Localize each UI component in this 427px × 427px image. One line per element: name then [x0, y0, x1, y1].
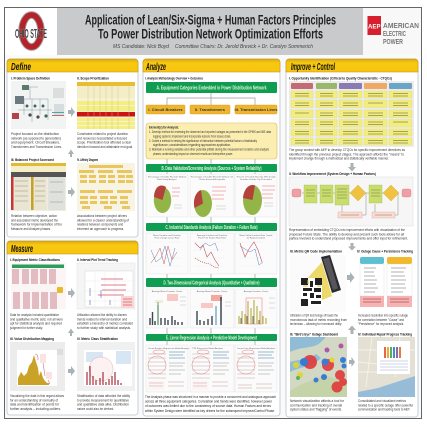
arrow	[68, 366, 75, 376]
metric class stratification: nature could also be derived.	[77, 407, 114, 411]
outage cause and persistence tracking	[357, 248, 413, 326]
analyze summary: of outcomes was limited due to the consistency of source data. Human Factors and errors	[145, 403, 271, 408]
equipment metric classifications: and qualitative metric sets; not all were	[10, 317, 63, 321]
subtitle: Committee Chairs: Dr. Jerold Brevick + Dr. Carolyn Sommerich	[175, 44, 313, 50]
arrow	[68, 288, 75, 298]
scope prioritization	[77, 76, 135, 149]
bar chart 2	[190, 289, 234, 328]
elements for analysis: phases; understanding impact on observed results and interpretive power.	[153, 152, 233, 156]
arrow	[347, 272, 354, 283]
metric class stratification: and qualitative data alike. Distribution	[77, 403, 129, 407]
bar: equipment categories: A. Equipment Categories Embedded in Power Distribution Network	[156, 86, 267, 92]
balanced project scorecard: and associated metric developed the	[11, 218, 58, 222]
pie chart 3: Duration Outside Top Percentiles	[240, 178, 273, 181]
line chart 2: From Prior Failure Rate Rate	[198, 236, 227, 240]
analyze summary: across all three equipment categories. Correlation and trends were identified, however power	[145, 399, 273, 404]
affinity diagram	[77, 157, 135, 231]
logo: American Electric Power: AEP	[368, 24, 380, 30]
connectors	[167, 93, 255, 345]
elements for analysis: 2. Create a method for testing the significance of interaction between potential factors of statistically	[149, 139, 257, 143]
affinity diagram: allowed for a clearer understanding of	[77, 218, 130, 222]
bird's eye outage dashboard: Network visualization affords a tool for	[290, 399, 345, 403]
balanced project scorecard: framework for implementation of the	[11, 223, 62, 227]
bird's eye outage dashboard: communication and tracking of overall	[290, 403, 342, 407]
value distribution mapping	[10, 336, 65, 411]
interval plot trend tracking: establish a hierarchy of metrics correlated	[77, 322, 133, 326]
individual repair progress tracking	[358, 332, 415, 412]
analyze heading	[143, 59, 280, 73]
bar: industrial standards	[146, 223, 277, 231]
problem space definition: Project focused on the distribution	[11, 132, 59, 136]
arrow	[68, 150, 74, 157]
panel: measure	[7, 241, 138, 415]
panel: analyze	[143, 59, 280, 416]
analyze subheading: I. Analysis Methodology Overview + Outcomes	[145, 76, 204, 80]
workflow description	[289, 228, 408, 241]
value distribution mapping: data and identification of points for	[10, 403, 60, 407]
pie chart 1: Root Delay Analysis	[157, 178, 178, 181]
metric class stratification: to provide measurement for quantitative	[77, 398, 129, 402]
equipment metric classifications: Data for analysis included quantitative	[10, 313, 59, 317]
logo: American Electric Power: ELECTRIC	[383, 31, 406, 38]
QR code implementation	[290, 248, 347, 326]
scope prioritization: scope. Prioritization tool afforded a clear	[77, 141, 132, 145]
bar: linear regression	[146, 334, 277, 342]
value distribution mapping: further analysis – including outliers.	[10, 407, 61, 411]
interval plot trend tracking: II. Interval Plot Trend Tracking	[77, 257, 118, 262]
outage cause and persistence tracking: for correlation between "Cause" and	[358, 318, 404, 322]
workflow subheading: II. Workflow Improvement (System Design + Human Factors)	[289, 171, 377, 176]
elements for analysis	[146, 123, 277, 159]
box: transmission lines	[235, 105, 278, 114]
regression panel 3: Transit Line Regression Model Analysis	[237, 347, 276, 350]
problem space definition	[11, 76, 66, 149]
workflow description: proposed Future State. The ability to develop and present such tools allows for all	[289, 232, 404, 236]
bar chart 2: Average Mean Duration, Cause	[197, 290, 228, 293]
regression panel 1	[146, 345, 190, 392]
elements for analysis: 1. Develop method for reviewing the observed and reported outages as presented in the OPMS and IBS data	[149, 130, 272, 134]
affinity diagram: relations between components and	[77, 223, 123, 227]
bird's eye outage dashboard: III. "Bird's Eye" Outage Dashboard	[290, 332, 338, 336]
line chart 3: Mean Value Duration Rate Trends	[240, 234, 273, 237]
CTQC table	[289, 81, 414, 147]
scope prioritization: II. Scope Prioritization	[77, 76, 109, 80]
box: transmission lines: III. Transmission Lines	[235, 107, 278, 112]
value distribution mapping: III. Value Distribution Mapping	[10, 336, 54, 341]
bar: linear regression: E. Linear Regression Analysis + Predictive Model Development	[166, 336, 257, 342]
pie chart 2: Charts Ensured Acceptable	[199, 178, 226, 181]
bar: two-dimensional categorical: D. Two-Dimensional Categorical Analysis (Quantitative + Qualitative)	[164, 280, 260, 286]
bar: two-dimensional categorical	[146, 278, 277, 287]
individual repair progress tracking: related to a specific outage offer powerful	[358, 403, 413, 407]
problem space definition: network (as opposed to generation)	[11, 136, 62, 140]
bar chart 1: Average Mean Duration, Cause	[152, 290, 183, 293]
CTQC description: identified through the previous project stages. The approach affords the "means" to	[289, 152, 404, 156]
bar: equipment categories	[146, 82, 277, 93]
outage cause and persistence tracking: Increased resolution into specific outage	[358, 314, 408, 318]
value distribution mapping: Visualizing the data in this regard allows	[10, 394, 64, 398]
box: transformers	[190, 105, 230, 114]
balanced project scorecard: Measure and Analyze phases.	[11, 227, 51, 231]
logo: American Electric Power: AMERICAN	[383, 23, 419, 30]
elements for analysis: 3. Maintain a running variable and other potential pitfalls during the measurement creation and analysis	[149, 148, 269, 152]
analyze heading: Analyze	[145, 62, 166, 73]
line chart 1	[146, 233, 188, 274]
interval plot trend tracking: trends related to interval duration and	[77, 317, 127, 321]
scope prioritization: Constraints related to project duration	[77, 132, 128, 136]
arrow	[349, 357, 355, 367]
QR code implementation: Utilization of QR technology off-loads the	[290, 314, 338, 318]
arrow	[68, 328, 74, 336]
equipment metric classifications: I. Equipment Metric Classifications	[10, 257, 61, 262]
balanced project scorecard: III. Balanced Project Scorecard	[11, 157, 54, 162]
affinity diagram: Associations between project drivers	[77, 214, 127, 218]
bar chart 3	[235, 289, 277, 328]
regression panel 3	[235, 345, 277, 392]
equipment metric classifications: apt for statistical analysis and required	[10, 322, 62, 326]
line chart 1: From Outage Cause Rate	[154, 236, 180, 240]
analyze summary: within System Design were identified as key drivers for the subsequent Improve/Control Phase.	[145, 408, 275, 413]
line chart 2: Average Duration and Duration	[197, 234, 228, 237]
problem space definition: I. Problem Space Definition	[11, 76, 50, 80]
interval plot trend tracking	[77, 257, 135, 330]
regression panel 2: TTR Regression Model Analysis	[192, 347, 224, 350]
define heading: Define	[11, 62, 31, 73]
equipment metric classifications	[9, 257, 66, 330]
measure heading: Measure	[11, 244, 33, 255]
problem space definition: Transformers and Transmission Lines.	[11, 145, 62, 149]
interval plot trend tracking: to further study with statistical analysis.	[77, 326, 131, 330]
bird's eye outage dashboard	[290, 332, 347, 412]
line chart 2	[190, 233, 234, 274]
logo: Ohio State	[15, 15, 47, 47]
subtitle: MS Candidate: Nick Boyd	[113, 44, 169, 50]
pie chart 2	[190, 174, 234, 217]
arrow	[68, 107, 75, 117]
panel: define	[7, 59, 138, 237]
bird's eye outage dashboard: system status and "flagging" of events.	[290, 408, 342, 412]
pie chart 1	[146, 174, 188, 217]
analyze summary	[145, 394, 276, 413]
logo: American Electric Power	[368, 16, 419, 46]
title	[85, 12, 336, 42]
metric class stratification	[77, 336, 135, 411]
line chart 1: Mean Duration and Duration	[153, 234, 182, 237]
define heading	[7, 59, 138, 73]
pie chart 2: Percentage of Trouble Records Without Out	[191, 176, 234, 178]
measure heading	[7, 241, 138, 255]
regression panel 2	[190, 345, 234, 392]
scope prioritization: and resources necessitated a focused	[77, 136, 127, 140]
arrow	[348, 163, 356, 172]
elements for analysis: significance; considerations regarding approaches application.	[153, 143, 231, 147]
header band	[5, 8, 421, 55]
arrow	[68, 187, 75, 197]
arrow	[348, 326, 356, 334]
header band: OHIO STATE	[15, 26, 47, 41]
problem space definition: and equipment: Circuit Breakers,	[11, 141, 60, 145]
equipment metric classifications: judgment for further study.	[9, 326, 43, 330]
scope prioritization: direction forward and attainable end goal.	[77, 145, 133, 149]
box: transformers: II. Transformers	[195, 107, 226, 112]
balanced project scorecard	[11, 157, 66, 231]
metric class stratification: IV. Metric Class Stratification	[77, 336, 118, 341]
line chart 3: for Repeat Incident	[247, 236, 266, 240]
opportunity identification subheading: I. Opportunity Identification (Critical to Quality Characteristic - CTQCs)	[289, 76, 393, 80]
bar chart 1	[146, 289, 188, 328]
affinity diagram: informed an approach to progress.	[77, 227, 124, 231]
bar: industrial standards: C. Industrial Standards Analysis (Failure Duration + Failure Rate)	[166, 225, 258, 231]
logo: American Electric Power: POWER	[383, 39, 403, 46]
line chart 3	[235, 233, 277, 274]
outage cause and persistence tracking: "Persistence" for improved analysis.	[358, 322, 404, 326]
value distribution mapping: for an understanding of normality of	[10, 398, 59, 402]
CTQC description: implement change through a methodical and statistically verifiable manner.	[289, 157, 389, 161]
box: circuit breakers: I. Circuit Breakers	[148, 107, 183, 112]
interval plot trend tracking: Utilization allowed the ability to discern	[77, 313, 127, 317]
improve heading	[286, 59, 418, 73]
pie chart 3: Percent of Trouble Records With Invalid	[237, 176, 276, 178]
balanced project scorecard: Relation between objective, action	[11, 214, 57, 218]
pie chart 3	[235, 174, 277, 217]
elements for analysis: Element(s) for Analysis:	[149, 126, 179, 130]
metric class stratification: Stratification of data afforded the ability	[77, 394, 130, 398]
subtitle	[113, 44, 313, 50]
bar chart 3: Average Duration, Cause	[244, 290, 269, 293]
elements for analysis: logging systems; implement and incorporate lessons from issues chain.	[153, 134, 231, 138]
bar: data validation: B. Data Validation/Screening Analysis (Sources + System Reliability)	[162, 166, 262, 172]
QR code implementation: technician – allowing for increased utility.	[290, 322, 342, 326]
pie chart 1: Percentage of Trouble Records Without	[148, 176, 187, 178]
title: To Power Distribution Network Optimization Efforts	[98, 26, 323, 42]
box: circuit breakers	[146, 105, 185, 114]
arrow	[348, 243, 356, 250]
bar: data validation	[146, 164, 277, 172]
regression panel 1: Circuit Breaker Regression Model Analysis	[148, 347, 190, 350]
individual repair progress tracking: Consolidated and visualized metrics	[358, 399, 406, 403]
improve heading: Improve + Control	[291, 62, 335, 73]
workflow diagram	[289, 177, 413, 226]
individual repair progress tracking: communication and tracking tools to AEP.	[358, 408, 410, 412]
panel: improve and control	[286, 59, 418, 417]
QR code implementation: III. Metric QR Code Implementation	[290, 248, 342, 254]
CTQC description	[289, 148, 405, 161]
affinity diagram: IV. Affinity Diagram	[77, 157, 98, 162]
analyze summary: The Analysis phase was structured in a manner to provide a concurrent and analogous approach	[145, 394, 276, 399]
QR code implementation: monotonous task of metric recording from	[290, 318, 347, 322]
